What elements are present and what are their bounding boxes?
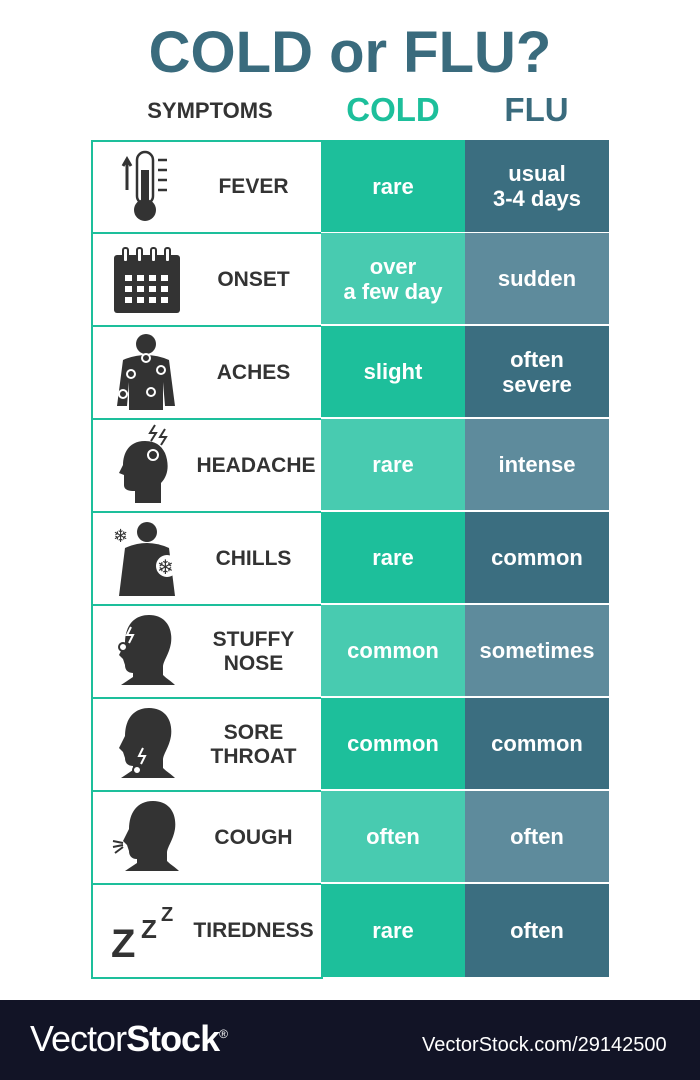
- row: sore throat: common: [491, 731, 583, 756]
- icon: chills: ❄: [113, 526, 128, 547]
- row: stuffy nose: sometimes: [480, 638, 594, 663]
- row: stuffy nose: NOSE: [224, 652, 283, 674]
- row: headache: intense: [498, 452, 576, 477]
- icon: headache: [119, 424, 168, 503]
- icon: zzz: Z: [141, 914, 157, 944]
- row: chills: common: [491, 545, 583, 570]
- row: tiredness: rare: [372, 918, 414, 943]
- row: sore throat: THROAT: [211, 744, 296, 768]
- icon: zzz: Z: [111, 922, 135, 966]
- row: tiredness: [111, 884, 609, 977]
- icon: stuffy nose head: [118, 615, 175, 685]
- row: tiredness: TIREDNESS: [193, 918, 314, 942]
- header: cold: COLD: [346, 91, 440, 128]
- icon: calendar: [114, 247, 180, 313]
- row: aches: slight: [364, 359, 422, 384]
- row: onset: over: [370, 254, 416, 278]
- row: headache: [119, 419, 609, 510]
- row: fever: [122, 140, 609, 232]
- row: headache: rare: [372, 452, 414, 477]
- row: fever: usual: [508, 161, 566, 186]
- row: aches: often: [510, 346, 564, 372]
- dividers: [91, 232, 321, 234]
- title: COLD or FLU?: [149, 20, 551, 85]
- row: sore throat: common: [347, 731, 439, 756]
- row: stuffy nose: STUFFY: [213, 628, 294, 650]
- icon: chills: ❄: [157, 555, 174, 579]
- row: aches: ACHES: [217, 360, 290, 384]
- icon: body aches: [117, 334, 175, 410]
- icon: cough head: [112, 801, 179, 871]
- header: symptoms: SYMPTOMS: [147, 98, 273, 123]
- row: chills: [113, 512, 609, 603]
- row: fever: 3-4 days: [493, 186, 581, 211]
- row: cough: [112, 791, 609, 882]
- row: chills: rare: [372, 545, 414, 570]
- footer: [0, 1000, 700, 1080]
- icon: sore throat head: [119, 708, 175, 778]
- row: onset: [114, 233, 609, 324]
- row: stuffy nose: common: [347, 638, 439, 663]
- row: stuffy nose: [118, 605, 609, 696]
- row: onset: ONSET: [217, 268, 290, 290]
- icon: zzz: [111, 904, 173, 966]
- row: fever: FEVER: [218, 174, 288, 198]
- row: cough: often: [510, 824, 564, 849]
- row: fever: rare: [372, 174, 414, 198]
- icon: chills: [113, 522, 175, 596]
- row: onset: sudden: [498, 266, 576, 291]
- icon: zzz: Z: [161, 904, 173, 926]
- row: tiredness: often: [510, 918, 564, 943]
- row: onset: a few day: [343, 278, 443, 304]
- icon: thermometer: [122, 150, 167, 221]
- row: sore throat: [119, 698, 609, 789]
- row: aches: [117, 326, 609, 417]
- header: flu: FLU: [504, 91, 569, 128]
- row: cough: COUGH: [214, 826, 293, 848]
- row: headache: HEADACHE: [196, 454, 316, 476]
- footer logo: VectorStock®: [30, 1018, 227, 1059]
- row: chills: CHILLS: [216, 546, 291, 570]
- table: [91, 140, 609, 979]
- row: cough: often: [366, 824, 420, 849]
- footer url: VectorStock.com/29142500: [422, 1034, 667, 1056]
- row: aches: severe: [502, 372, 572, 396]
- row: sore throat: SORE: [224, 720, 283, 744]
